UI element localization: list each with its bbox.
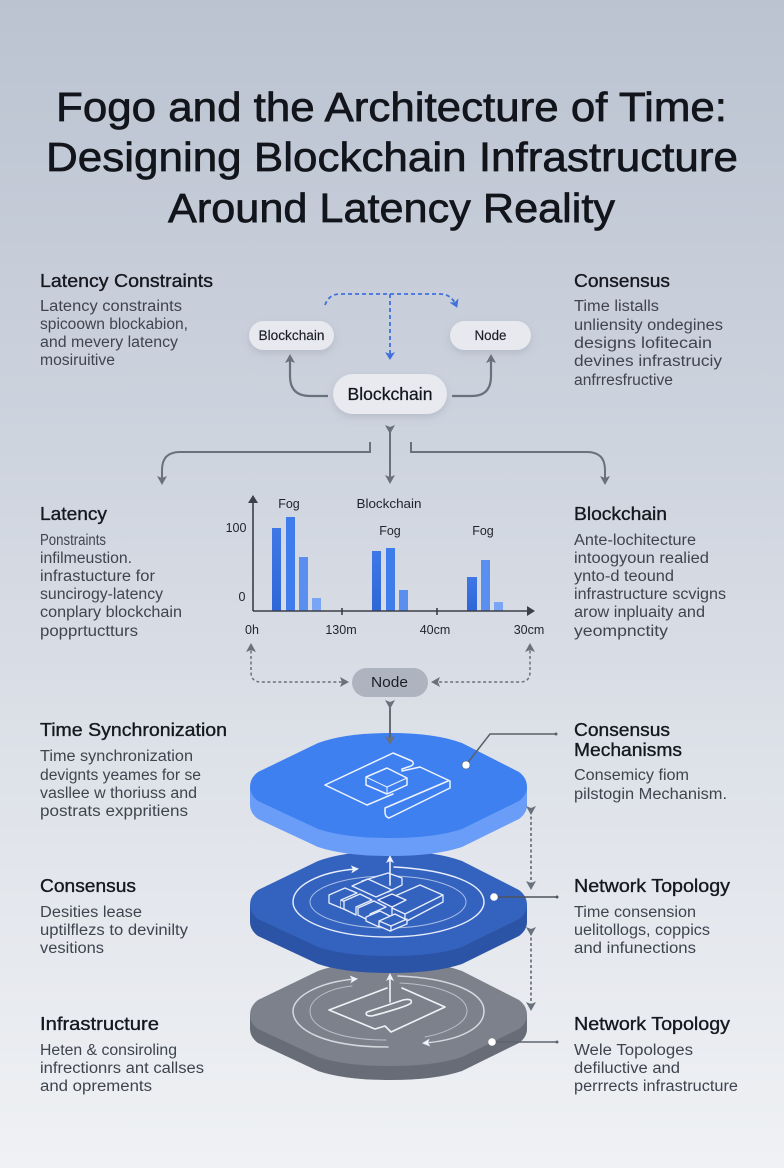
text block: consensus mechanisms: Consensus: [574, 720, 670, 740]
node: lower pill: [352, 668, 428, 697]
text block: time synchronization: postrats exppritiens: [40, 803, 188, 820]
text block: consensus top: [574, 271, 723, 389]
text block: blockchain: [574, 504, 726, 640]
text block: time synchronization: devignts yeames for se: [40, 767, 201, 784]
chart labels: Fog: [472, 524, 494, 538]
text block: latency: Latency: [40, 504, 107, 524]
text block: blockchain: intoogyoun realied: [574, 550, 709, 567]
icon: blue plate tray and chip: [325, 753, 450, 818]
chart labels: Blockchain: [356, 497, 422, 511]
node: blockchain centre: [333, 374, 447, 414]
text block: network topology: Time consension: [574, 904, 696, 921]
node: blockchain centre: Blockchain: [348, 384, 432, 404]
chart labels: 30cm: [514, 623, 544, 637]
text block: network topology lower: Network Topology: [574, 1014, 730, 1034]
arrows: dashed plate links: [530, 811, 532, 1007]
text block: consensus top: devines infrastruciy: [574, 353, 722, 370]
title: Around Latency Reality: [168, 185, 616, 231]
text block: latency constraints: and mevery latency: [40, 334, 178, 351]
text block: network topology lower: defiluctive and: [574, 1060, 680, 1077]
text block: latency constraints: mosiruitive: [40, 352, 115, 369]
text block: latency: [40, 504, 182, 640]
title: Designing Blockchain Infrastructure: [46, 134, 738, 180]
chart axes: [253, 498, 532, 615]
icon: dark plate rings and blocks: [293, 858, 484, 937]
arrowheads: dashed chart tops: [246, 643, 535, 652]
text block: time synchronization: Time synchronization: [40, 748, 193, 765]
text block: network topology lower: perrrects infrastructure: [574, 1078, 738, 1095]
chart labels: 0h: [245, 623, 259, 637]
callout: gray plate dot: [488, 1038, 558, 1046]
callout: blue plate dot: [462, 732, 558, 769]
text block: consensus mechanisms: [574, 720, 727, 803]
text block: blockchain: Blockchain: [574, 504, 667, 524]
text block: blockchain: infrastructure scvigns: [574, 586, 726, 603]
text block: latency constraints: Latency constraints: [40, 298, 182, 315]
arrows: dashed chart to node: [251, 645, 530, 682]
chart labels: 0: [239, 590, 246, 604]
text block: network topology lower: Wele Topologes: [574, 1042, 693, 1059]
node: blockchain left: Blockchain: [258, 328, 324, 343]
node: node right: Node: [474, 328, 506, 343]
text block: consensus top: designs lofitecain: [574, 335, 712, 352]
text block: infrastructure: and oprements: [40, 1078, 152, 1095]
text block: infrastructure: infrectionrs ant callses: [40, 1060, 204, 1077]
text block: infrastructure: [40, 1014, 204, 1095]
text block: network topology lower: [574, 1014, 738, 1095]
text block: latency constraints: spicoown blockabion,: [40, 316, 188, 333]
text block: consensus top: Consensus: [574, 271, 670, 291]
text block: network topology: uelitollogs, coppics: [574, 922, 710, 939]
callout: dark plate dot: [490, 893, 558, 901]
text block: consensus top: Time listalls: [574, 298, 659, 315]
text block: blockchain: yeompnctity: [574, 623, 668, 640]
title: [46, 84, 738, 231]
text block: latency: infilmeustion.: [40, 550, 132, 567]
text block: network topology: Network Topology: [574, 876, 730, 896]
text block: latency: suncirogy-latency: [40, 586, 163, 603]
chart labels: 40cm: [420, 623, 450, 637]
text block: blockchain: Ante-lochitecture: [574, 532, 696, 549]
title: Fogo and the Architecture of Time:: [56, 84, 727, 130]
arrows: branch connectors: [162, 430, 605, 481]
chart labels: 130m: [325, 623, 357, 637]
text block: latency: conplary blockchain: [40, 604, 182, 621]
text block: network topology: [574, 876, 730, 957]
text block: consensus mechanisms: pilstogin Mechanism.: [574, 786, 727, 803]
text block: blockchain: ynto-d teound: [574, 568, 674, 585]
text block: latency: Ponstraints: [40, 532, 106, 549]
text block: consensus mechanisms: Consemicy fiom: [574, 767, 689, 784]
plate: consensus mechanisms blue: [250, 732, 558, 856]
chart labels: 100: [226, 521, 246, 535]
text block: blockchain: arow inpluaity and: [574, 604, 705, 621]
plate: infrastructure gray: [250, 961, 558, 1080]
chart labels: [226, 497, 544, 637]
text block: infrastructure: Infrastructure: [40, 1014, 159, 1034]
node: blockchain left: [249, 321, 334, 350]
chart bars: [272, 517, 503, 611]
text block: consensus: Consensus: [40, 876, 136, 896]
bar chart: [226, 497, 544, 637]
text block: time synchronization: vasllee w thoriuss and: [40, 785, 197, 802]
text block: latency: infrastucture for: [40, 568, 155, 585]
text block: latency constraints: Latency Constraints: [40, 271, 213, 291]
chart labels: Fog: [278, 497, 300, 511]
text block: latency constraints: [40, 271, 213, 369]
text block: consensus: uptilflezs to devinilty: [40, 922, 188, 939]
text block: latency: popprtuctturs: [40, 623, 138, 640]
text block: consensus: vesitions: [40, 940, 104, 957]
arrows: blockchain to side nodes: [290, 358, 491, 396]
node: node right: [450, 321, 531, 350]
text block: infrastructure: Heten & consiroling: [40, 1042, 177, 1059]
text block: time synchronization: [40, 720, 227, 820]
text block: consensus mechanisms: Mechanisms: [574, 740, 682, 760]
node: lower pill: Node: [371, 674, 408, 691]
text block: consensus top: anfrresfructive: [574, 372, 673, 389]
text block: time synchronization: Time Synchronization: [40, 720, 227, 740]
arrow: node to top plate: [389, 705, 391, 741]
text block: network topology: and infunections: [574, 940, 696, 957]
icon: gray plate rings and tray: [293, 976, 484, 1047]
text block: consensus: Desities lease: [40, 904, 142, 921]
arrows: blue dashed top connector: [325, 294, 456, 357]
text block: consensus: [40, 876, 188, 957]
text block: consensus top: unliensity ondegines: [574, 317, 723, 334]
chart labels: Fog: [379, 524, 401, 538]
plate: consensus dark blue: [250, 851, 558, 973]
